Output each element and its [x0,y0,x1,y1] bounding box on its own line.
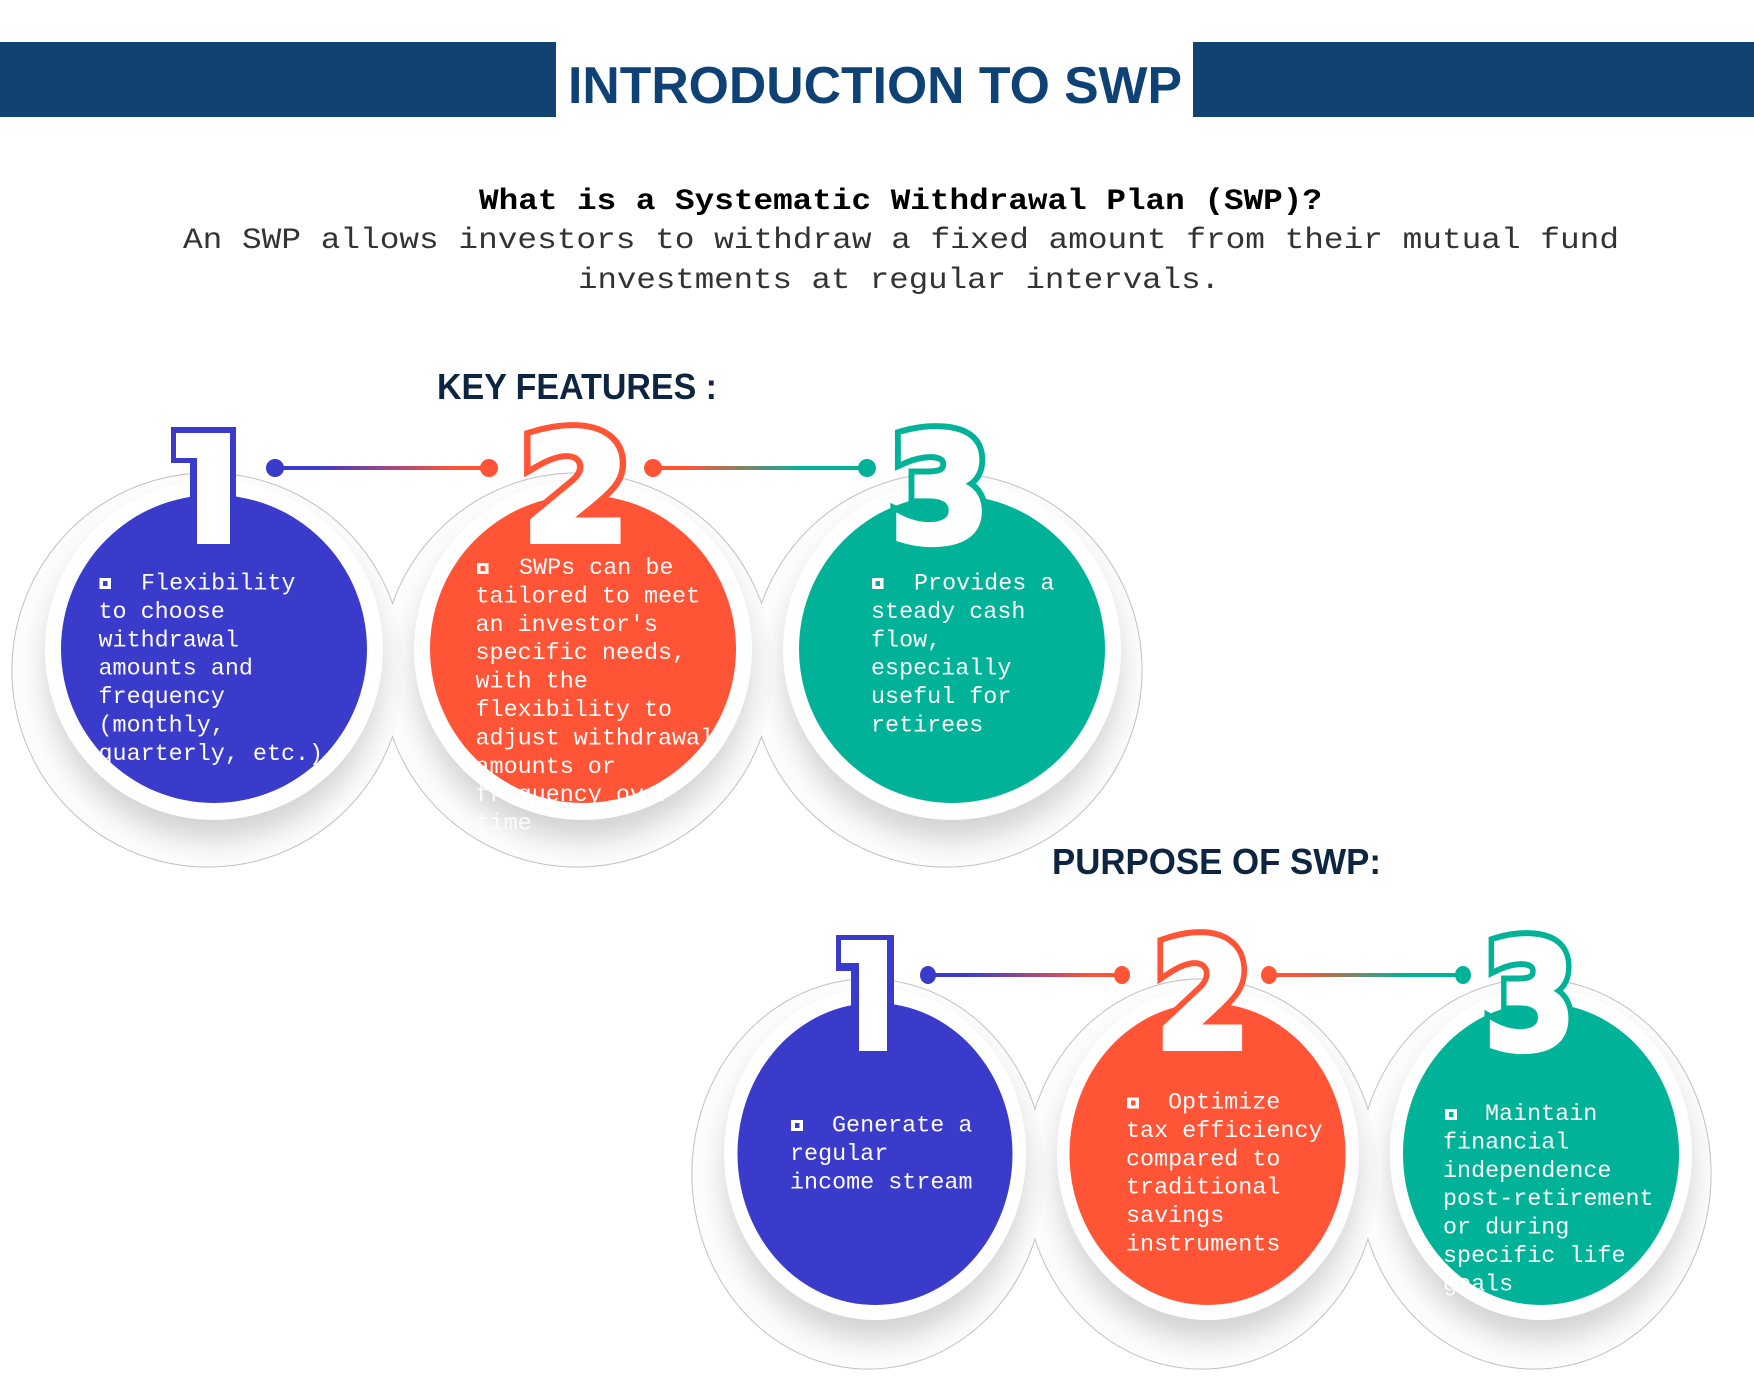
numeral 1 [171,427,236,544]
feature 3 text: retirees [871,714,983,740]
numeral 1 [836,935,894,1051]
purpose 3 text: independence [1443,1159,1611,1185]
purpose 2 text: Optimize [1168,1090,1280,1116]
feature 2 text: specific needs, [476,641,686,667]
purpose 1 text: regular [790,1142,888,1168]
feature 1 text: to choose [98,600,225,626]
numeral 1: 1 [813,905,923,1089]
feature 2 text: SWPs can be [519,556,673,582]
numeral 3: 3 [890,405,990,577]
purpose 2 text [1126,1090,1323,1258]
feature 2 text: adjust withdrawal [476,726,714,752]
purpose 2 text: compared to [1126,1147,1280,1173]
panel: key features [12,398,1142,867]
feature 3 text: steady cash [871,600,1025,626]
intro definition line 2: investments at regular intervals. [578,264,1220,298]
purpose 2 text: tax efficiency [1126,1119,1323,1145]
feature 1 text [98,572,323,768]
feature card 3 [783,405,1121,820]
purpose 3 text: financial [1443,1130,1569,1156]
feature 1 text: amounts and [98,657,253,683]
heading: key features: KEY FEATURES : [437,366,717,407]
purpose 3 text: Maintain [1485,1102,1597,1128]
numeral 1: 1 [150,398,260,582]
intro question heading: What is a Systematic Withdrawal Plan (SWP)? [479,185,1322,219]
heading: purpose of SWP: PURPOSE OF SWP: [1052,841,1381,882]
connector 1 to 2 [266,459,498,477]
feature 3 text: useful for [871,685,1011,711]
numeral 3: 3 [1484,912,1576,1085]
feature 3 text [871,572,1054,740]
intro text block [183,185,1619,298]
purpose 3 text: goals [1443,1272,1513,1298]
header band [0,42,1754,117]
numeral 3: 3 [1484,912,1576,1085]
intro definition line 1: An SWP allows investors to withdraw a fixed amount from their mutual fund [183,224,1619,258]
feature 1 text: (monthly, [98,714,225,740]
feature 2 text: an investor's [476,613,658,639]
feature card 2 [414,405,752,838]
feature 2 text: tailored to meet [476,584,700,610]
purpose 1 text [790,1114,972,1196]
feature 2 text [476,556,714,838]
feature 2 text: frequency over [476,783,672,809]
purpose 1 text: Generate a [832,1114,972,1140]
numeral 2: 2 [1155,911,1251,1083]
feature 1 bullet [100,578,111,589]
purpose 1 text: income stream [790,1170,972,1196]
title: INTRODUCTION TO SWP [568,57,1182,115]
feature card 1 [45,398,383,820]
feature 1 text: withdrawal [98,628,239,654]
purpose 2 text: instruments [1126,1232,1280,1258]
connector 2 to 3 [644,459,876,477]
panel: purpose of SWP [692,905,1711,1369]
numeral 2: 2 [521,405,631,577]
numeral 3: 3 [890,405,990,577]
feature 3 text: Provides a [914,572,1054,598]
purpose 3 bullet [1445,1109,1457,1120]
purpose 3 text: specific life [1443,1244,1625,1270]
feature 3 text: especially [871,657,1011,683]
connector 1 to 2 [920,966,1130,984]
feature 2 bullet [477,563,488,574]
numeral 2: 2 [1155,911,1251,1083]
purpose card 3 [1390,912,1692,1320]
feature 2 text: with the [476,670,588,696]
numeral 2: 2 [521,405,631,577]
purpose 1 bullet [791,1120,803,1131]
purpose 2 text: savings [1126,1204,1224,1230]
purpose 3 text [1443,1102,1654,1298]
feature 1 text: quarterly, etc.) [98,742,323,768]
purpose card 2 [1057,911,1359,1320]
purpose 3 text: or during [1443,1216,1569,1242]
connector 2 to 3 [1261,966,1471,984]
purpose 2 text: traditional [1126,1176,1280,1202]
feature 1 text: Flexibility [141,572,295,598]
feature 1 text: frequency [98,685,225,711]
feature 2 text: time [476,812,532,838]
feature 2 text: flexibility to [476,698,672,724]
purpose 2 bullet [1127,1098,1139,1108]
feature 3 text: flow, [871,628,941,654]
numeral 1: 1 [150,398,260,582]
purpose 3 text: post-retirement [1443,1187,1654,1213]
feature 3 bullet [872,578,884,589]
purpose card 1 [724,905,1026,1320]
feature 2 text: amounts or [476,755,616,781]
numeral 1: 1 [813,905,923,1089]
